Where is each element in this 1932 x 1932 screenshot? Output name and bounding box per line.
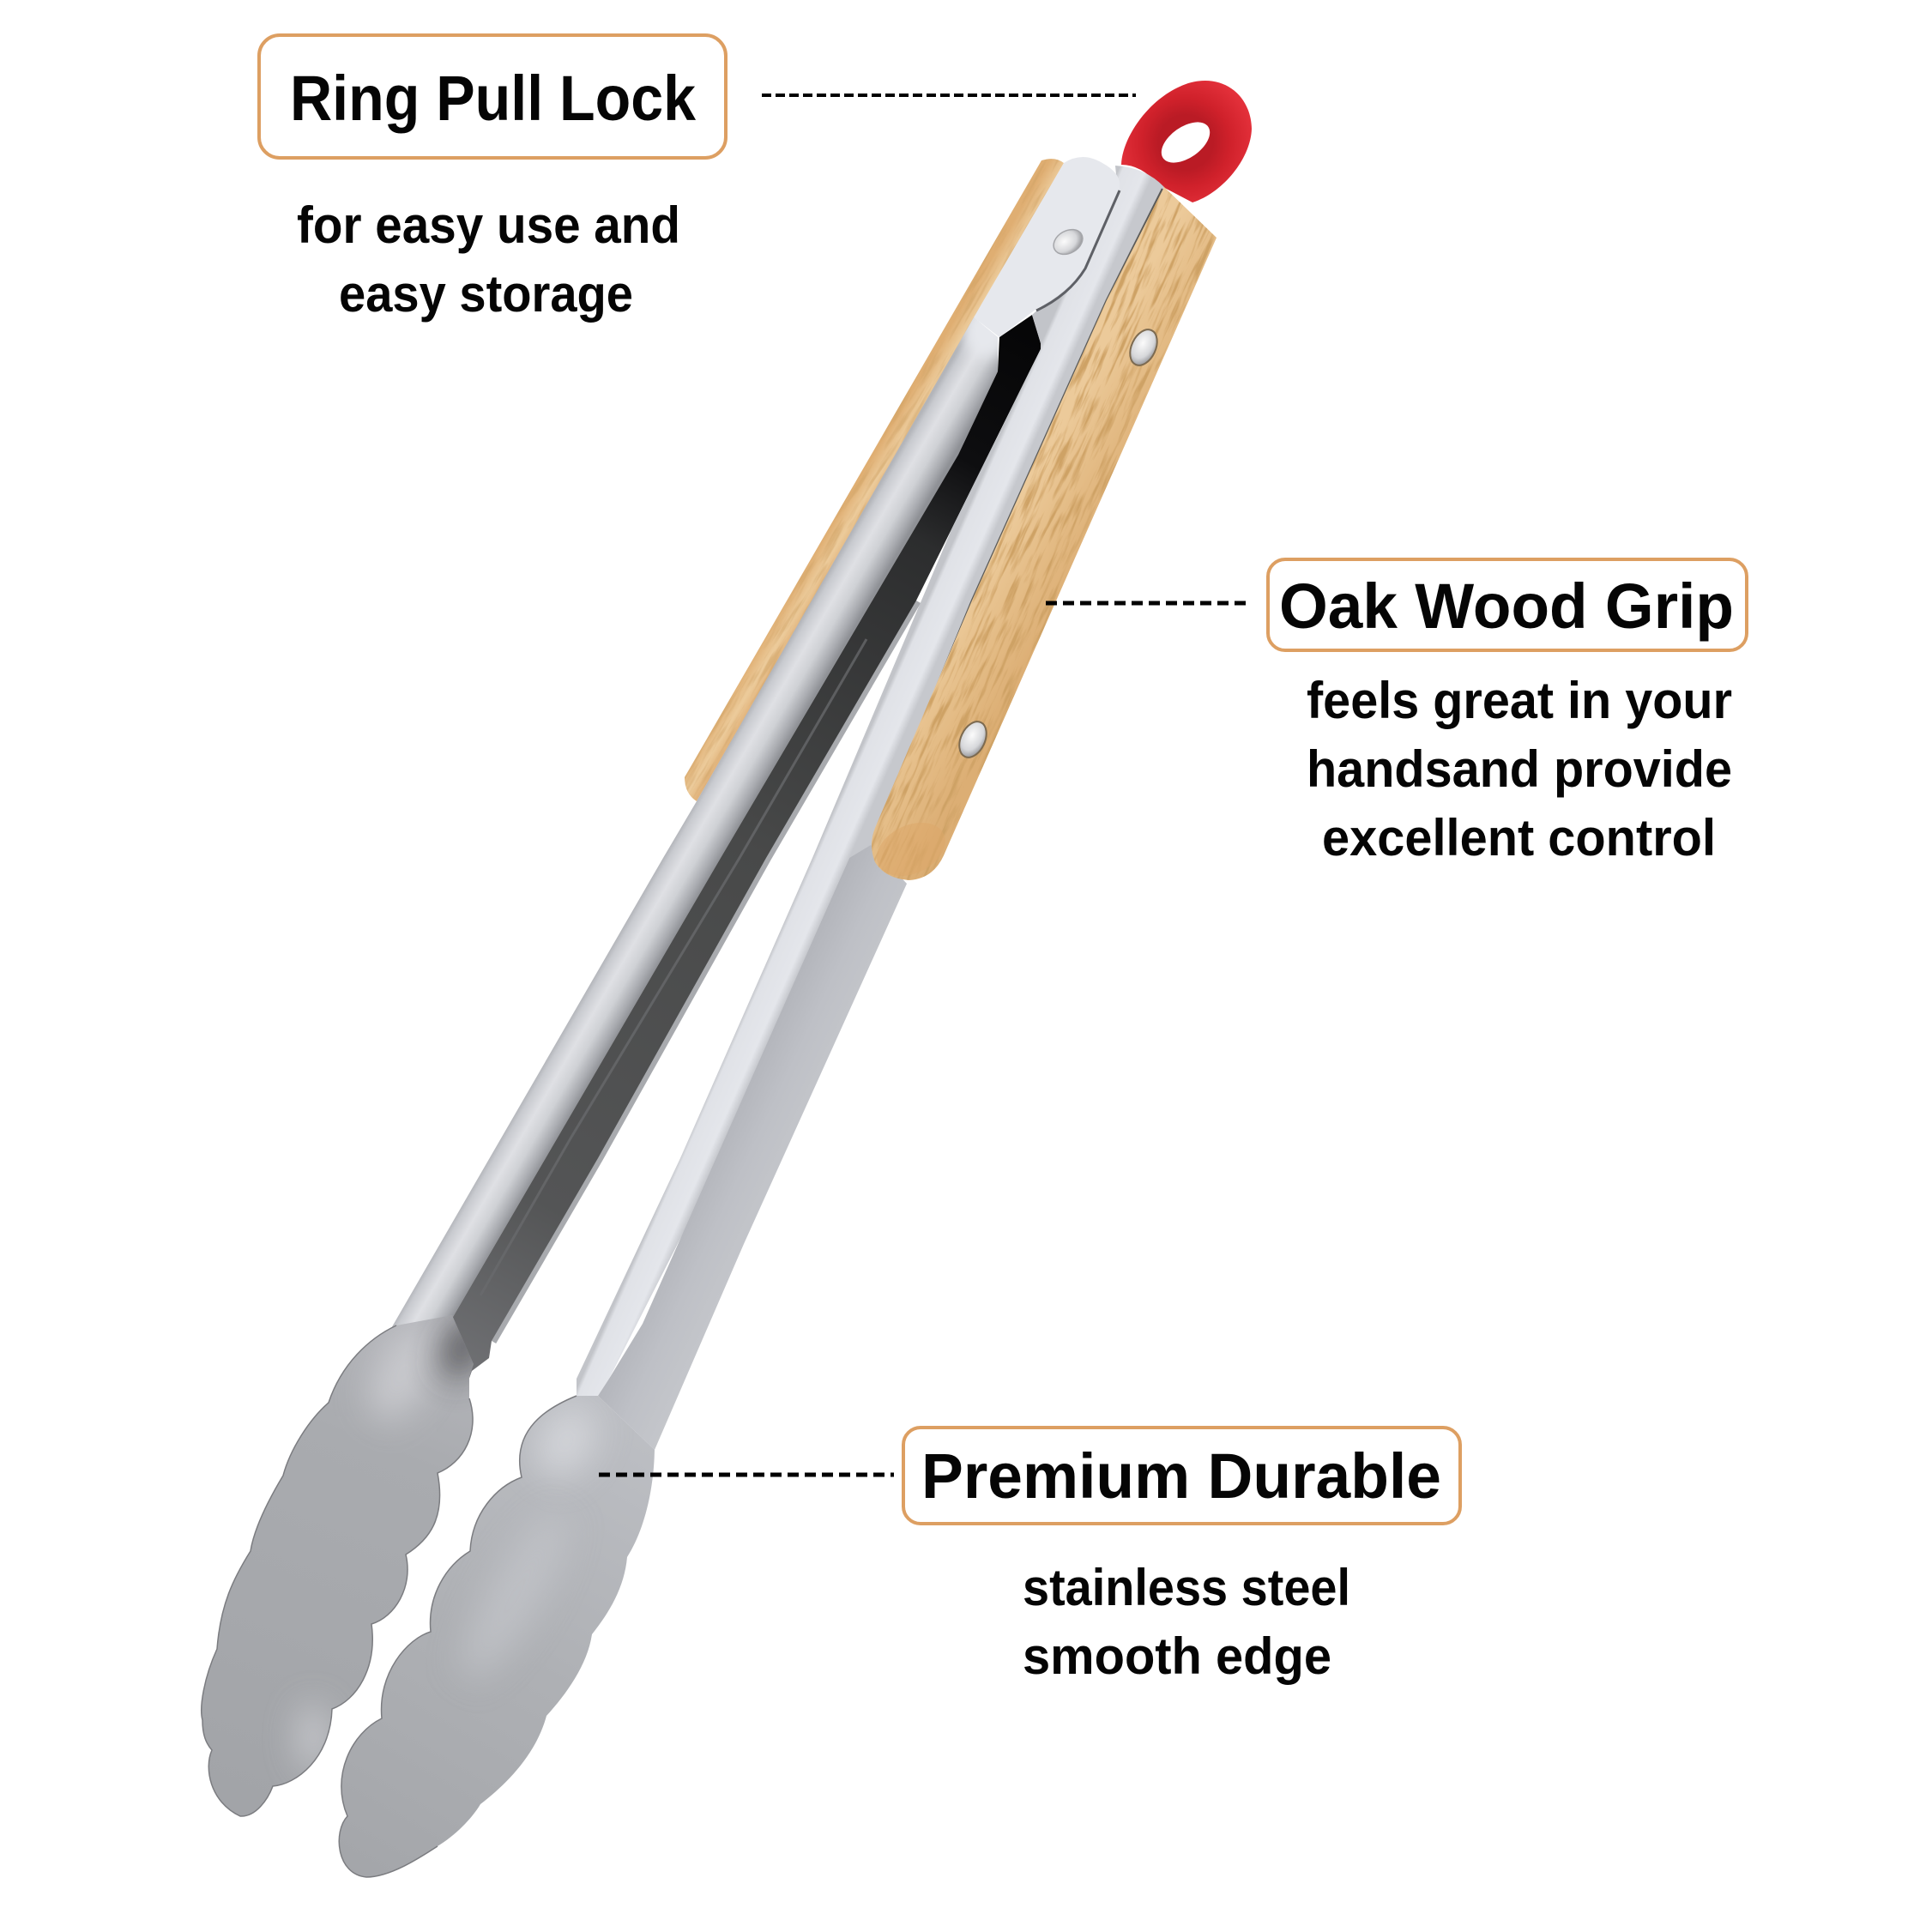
callout box bbox=[259, 35, 726, 158]
icon: red silicone ring pull bbox=[1121, 81, 1252, 202]
right head edge line bbox=[339, 1396, 577, 1877]
right arm bright band with top plate bbox=[577, 166, 1164, 1396]
dashed leader to wood grip bbox=[1046, 601, 1249, 606]
icon: lock plate rivet bbox=[1049, 225, 1087, 259]
left arm steel bbox=[390, 303, 1007, 1330]
sliding lock plate bbox=[974, 157, 1120, 337]
infographic: kitchen tongs with feature callouts bbox=[201, 33, 1748, 1878]
callout: Ring Pull Lock bbox=[259, 35, 1136, 323]
description line two: smooth edge bbox=[1023, 1627, 1331, 1685]
dark channel highlight bbox=[480, 639, 866, 1295]
left scalloped tong head bbox=[202, 1309, 493, 1816]
heading: Premium Durable: Premium Durable bbox=[921, 1440, 1441, 1512]
dashed leader to ring bbox=[762, 94, 1136, 97]
left wooden grip strip bbox=[685, 159, 1064, 801]
tongs product illustration bbox=[202, 81, 1284, 1877]
right arm groove line bbox=[875, 189, 1162, 836]
description line two: handsand provide bbox=[1307, 740, 1732, 798]
right oak wood grip bbox=[872, 187, 1217, 880]
lock plate dark edge bbox=[1036, 190, 1120, 311]
callout: Oak Wood Grip bbox=[1046, 559, 1747, 866]
dark inner channel of left arm bbox=[442, 315, 1041, 1383]
heading: Ring Pull Lock: Ring Pull Lock bbox=[290, 63, 697, 134]
dashed leader to steel head bbox=[599, 1472, 894, 1477]
thin grey edge beside channel bbox=[492, 601, 916, 1341]
heading: Oak Wood Grip: Oak Wood Grip bbox=[1279, 571, 1734, 642]
icon: upper wood rivet bbox=[1125, 325, 1162, 370]
description: premium durable: stainless steel bbox=[1023, 1559, 1350, 1616]
description line two: easy storage bbox=[339, 265, 633, 323]
callout box bbox=[1268, 559, 1747, 650]
left head edge line bbox=[202, 1325, 473, 1816]
description line three: excellent control bbox=[1322, 809, 1716, 866]
icon: lower wood rivet bbox=[954, 717, 992, 762]
description: ring pull lock: for easy use and bbox=[297, 196, 680, 254]
right scalloped tong head bbox=[339, 1394, 655, 1877]
right arm mid-grey face bbox=[598, 845, 907, 1450]
callout: Premium Durable bbox=[599, 1428, 1460, 1685]
callout box bbox=[903, 1428, 1460, 1524]
description: oak wood grip: feels great in your bbox=[1307, 672, 1732, 729]
